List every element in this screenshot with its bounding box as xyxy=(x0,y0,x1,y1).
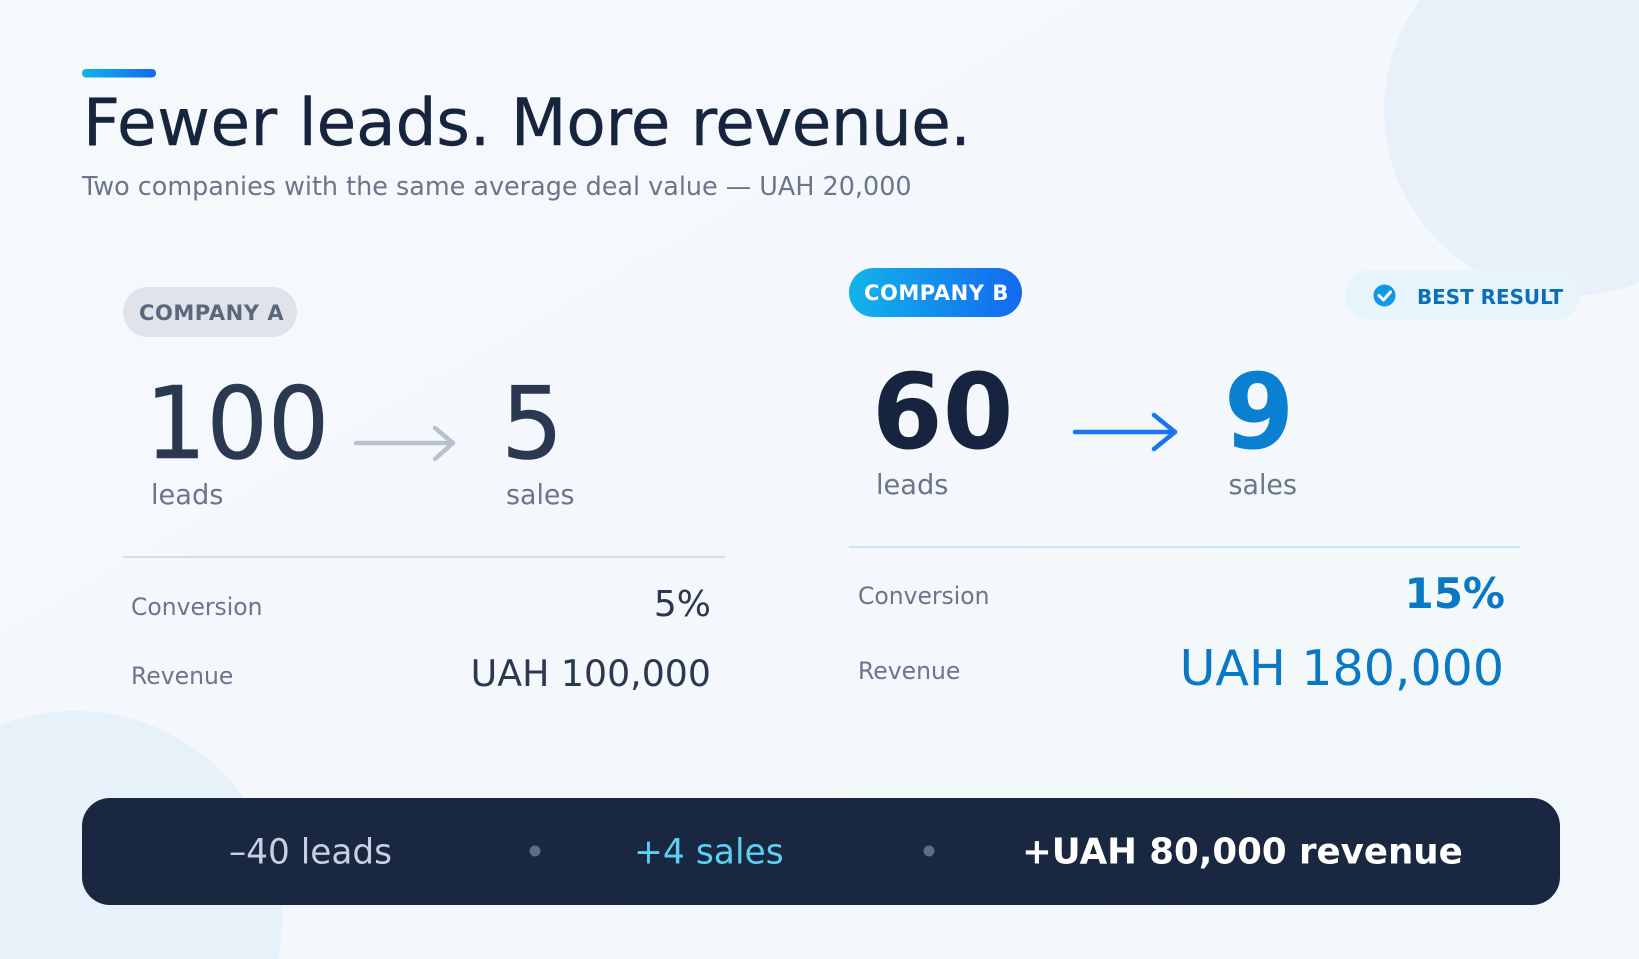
leads figure B: leads xyxy=(876,468,948,501)
revenue row A: UAH 100,000 xyxy=(471,652,711,695)
conversion row B: 15% xyxy=(1404,569,1505,618)
arrow B xyxy=(1075,415,1175,449)
icon: check xyxy=(1374,284,1396,306)
sales figure B: 9 xyxy=(1224,353,1294,473)
sales delta: +4 sales xyxy=(634,832,784,872)
conversion row B xyxy=(858,569,1505,618)
revenue row A xyxy=(131,652,711,695)
revenue delta: +UAH 80,000 revenue xyxy=(1022,832,1463,872)
sales figure A: sales xyxy=(506,480,574,511)
conversion row A: Conversion xyxy=(131,593,262,621)
arrow A xyxy=(356,428,453,459)
badge: company B xyxy=(849,268,1022,317)
badge: best result: BEST RESULT xyxy=(1417,285,1563,309)
leads figure A: 100 xyxy=(145,366,329,482)
badge: best result xyxy=(1345,270,1580,320)
panel: company B xyxy=(849,268,1580,697)
conversion row A: 5% xyxy=(654,584,711,625)
revenue row B: Revenue xyxy=(858,657,960,685)
sales figure B: sales xyxy=(1228,470,1297,501)
subtitle: Two companies with the same average deal value — UAH 20,000 xyxy=(81,172,912,202)
sales figure A: 5 xyxy=(501,366,563,482)
leads delta: –40 leads xyxy=(229,832,392,872)
badge: company A: COMPANY A xyxy=(139,301,284,325)
conversion row A xyxy=(131,584,711,625)
accent bar xyxy=(82,69,156,78)
leads figure A: leads xyxy=(151,478,223,511)
sales figure A xyxy=(501,366,574,511)
badge: company B: COMPANY B xyxy=(864,281,1009,305)
badge: company A xyxy=(123,287,297,337)
summary bar xyxy=(82,798,1560,905)
leads figure B: 60 xyxy=(872,353,1013,473)
revenue row B xyxy=(858,640,1504,697)
conversion row B: Conversion xyxy=(858,582,989,610)
revenue row B: UAH 180,000 xyxy=(1180,640,1504,697)
panel: company A xyxy=(123,287,725,695)
title: Fewer leads. More revenue. xyxy=(83,86,970,161)
revenue row A: Revenue xyxy=(131,662,233,690)
